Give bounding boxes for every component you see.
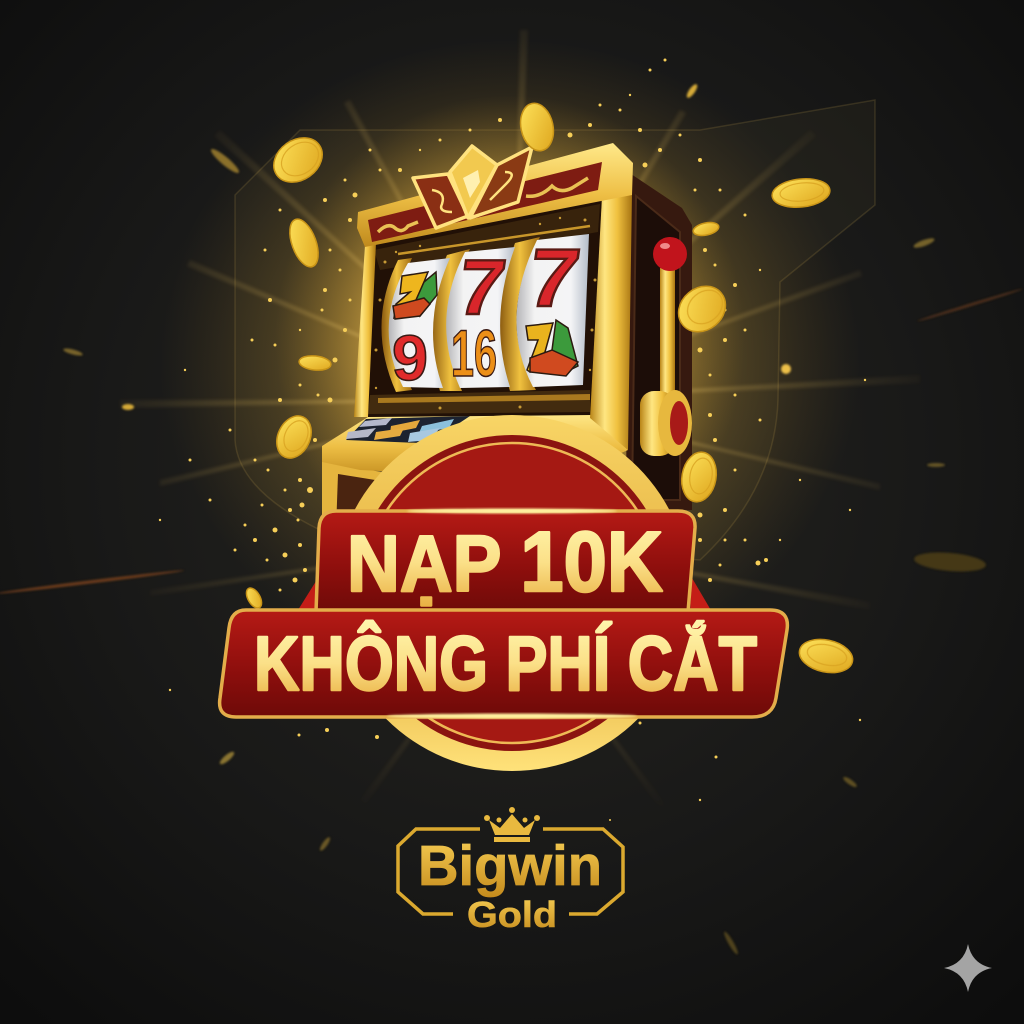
banner: NẠP 10K	[316, 508, 695, 612]
screen cabinet	[366, 198, 602, 417]
reel 3 top seven: 7	[522, 232, 585, 324]
banner highlight	[407, 508, 617, 514]
glass panel outline	[235, 100, 875, 560]
headline line 2: KHÔNG PHÍ CẮT	[254, 620, 757, 707]
logo: Bigwin Gold	[398, 807, 623, 935]
coin rims	[275, 135, 849, 669]
light rays	[120, 30, 920, 814]
control buttons	[346, 416, 470, 443]
headline line 1: NẠP 10K	[347, 515, 663, 610]
slot machine	[322, 143, 692, 530]
marquee	[357, 143, 633, 247]
machine side panel	[626, 172, 692, 510]
crown ornament	[413, 146, 532, 228]
upper screen rail	[398, 226, 590, 254]
glitter on screen border	[368, 204, 600, 414]
lower cabinet	[322, 413, 628, 530]
reel 2 bottom number: 16	[451, 316, 497, 390]
reel 1 bottom symbol: 9	[392, 322, 428, 394]
logo word Bigwin: Bigwin	[418, 834, 602, 898]
lever	[640, 237, 692, 456]
gold right pillar	[590, 193, 632, 450]
reel 2	[446, 243, 515, 390]
logo word Gold: Gold	[467, 894, 557, 935]
gold left pillar	[354, 243, 376, 417]
banner: KHÔNG PHÍ CẮT	[220, 610, 787, 718]
red wedges behind banners	[298, 578, 712, 612]
reel bezels	[381, 237, 540, 392]
flying coins	[243, 100, 856, 677]
logo crown	[484, 807, 540, 842]
central golden glow	[160, 40, 860, 680]
reel 3 bottom symbol	[526, 320, 578, 376]
screen inner rail	[378, 394, 590, 403]
banner highlight	[387, 714, 637, 718]
reel 1 top symbol	[393, 272, 437, 319]
gold particles	[159, 58, 866, 821]
reel 3	[516, 232, 589, 387]
reel 2 top seven: 7	[453, 243, 511, 331]
watermark sparkle	[944, 944, 992, 992]
badge circle	[334, 415, 690, 771]
reel 1	[389, 258, 450, 394]
logo octagon frame	[398, 829, 623, 914]
